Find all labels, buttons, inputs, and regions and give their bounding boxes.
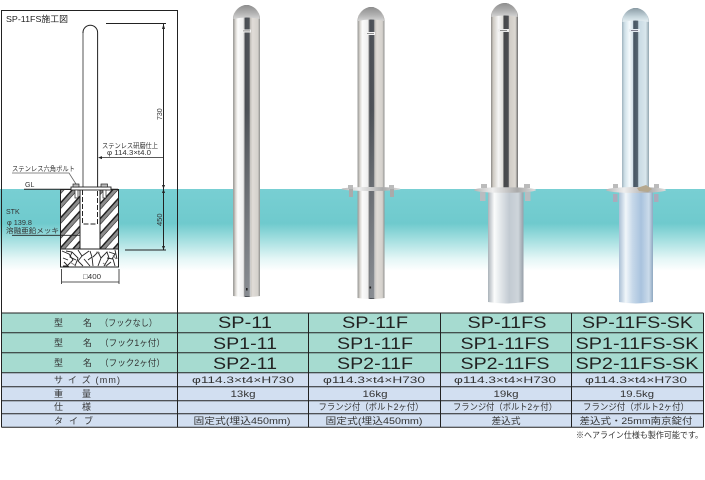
row labels: 量: [82, 389, 91, 399]
dimension: 450: 450: [155, 213, 164, 226]
GL label and ground line: GL: [25, 182, 34, 189]
model names: SP2-11: [213, 354, 277, 373]
dimension: 400: □400: [83, 272, 101, 281]
table grid: [2, 313, 704, 427]
specification table: [2, 313, 704, 428]
row labels: 型: [54, 318, 63, 328]
row labels: 名: [83, 357, 92, 368]
GL label and ground line: [24, 182, 118, 189]
bollard: SP-11F: [342, 7, 400, 299]
model names: [213, 313, 699, 373]
row labels: 型: [54, 338, 63, 348]
dimension: 400: [62, 269, 119, 284]
teal gradient band: [0, 189, 705, 271]
model names: SP2-11F: [337, 354, 413, 373]
row labels: 名: [83, 337, 92, 348]
model names: SP-11: [218, 313, 272, 332]
spec values: フランジ付（ボルト2ヶ付）: [453, 402, 557, 412]
model names: SP-11FS: [468, 313, 546, 332]
sleeve: [488, 192, 524, 304]
row labels: タ イ ブ: [54, 415, 93, 426]
callout: STK: 溶融亜鉛メッキ: [6, 226, 59, 235]
callout: STK: [6, 209, 80, 235]
spec values: 13kg: [230, 389, 256, 399]
spec values: φ114.3×t4×H730: [192, 375, 294, 385]
row labels: （フックなし）: [100, 318, 157, 328]
row labels: 重: [54, 388, 63, 399]
model names: SP2-11FS: [460, 354, 550, 373]
model names: SP-11F: [342, 313, 408, 332]
dimension: 730: 730: [157, 108, 164, 120]
table backgrounds: [2, 313, 704, 428]
spec values: φ114.3×t4×H730: [454, 375, 556, 385]
callout: stainless pipe: [98, 141, 163, 159]
pipe outline: [83, 25, 98, 187]
callout: STK: φ 139.8: [7, 220, 32, 227]
model names: SP1-11FS-SK: [576, 334, 699, 353]
row labels: [54, 317, 165, 426]
spec values: フランジ付（ボルト2ヶ付）: [318, 402, 424, 412]
bollard: SP-11FS: [474, 3, 536, 304]
spec values: 固定式(埋込450mm): [194, 415, 290, 426]
dimension: 730: [106, 24, 166, 250]
model names: SP1-11F: [337, 334, 413, 353]
spec values: φ114.3×t4×H730: [585, 375, 687, 385]
model names: SP1-11: [213, 334, 277, 353]
spec values: 19.5kg: [620, 389, 654, 399]
model names: SP1-11FS: [460, 334, 550, 353]
sleeve: [619, 192, 653, 304]
spec values: 19kg: [494, 389, 518, 399]
flange: [606, 184, 666, 202]
drawing title: SP-11FS施工図: [6, 14, 68, 24]
panel: construction drawing: [2, 10, 178, 313]
callout: stainless pipe: φ 114.3×t4.0: [107, 150, 151, 157]
spec values: [192, 375, 692, 426]
row labels: 様: [82, 401, 91, 412]
spec values: 16kg: [362, 389, 388, 399]
bollard: SP-11: [233, 5, 260, 297]
spec values: 差込式・25mm南京錠付: [580, 415, 692, 426]
drawing frame: [2, 10, 178, 313]
callout: hex bolt: ステンレス六角ボルト: [12, 164, 75, 173]
gravel: [62, 250, 117, 266]
flange: [342, 185, 400, 197]
bollard: SP-11FS-SK: [606, 8, 666, 303]
callout: hex bolt: [12, 164, 76, 184]
row labels: 名: [83, 317, 92, 328]
flange and bolts: [71, 184, 111, 198]
row labels: サ イ ズ (mm): [54, 374, 120, 385]
spec values: フランジ付（ボルト2ヶ付）: [583, 402, 689, 412]
row labels: 型: [54, 358, 63, 368]
model names: SP-11FS-SK: [582, 313, 694, 332]
row labels: （フック2ヶ付）: [100, 358, 165, 368]
spec values: 差込式: [492, 415, 520, 426]
callout: stainless pipe: ステンレス研磨仕上: [102, 141, 158, 150]
flange: [474, 184, 536, 201]
model names: SP2-11FS-SK: [576, 354, 699, 373]
spec values: φ114.3×t4×H730: [323, 375, 425, 385]
spec values: 固定式(埋込450mm): [326, 415, 422, 426]
callout: STK: STK: [6, 209, 20, 216]
foundation section: [60, 190, 118, 267]
row labels: 仕: [54, 401, 63, 412]
row labels: （フック1ヶ付）: [100, 338, 165, 348]
